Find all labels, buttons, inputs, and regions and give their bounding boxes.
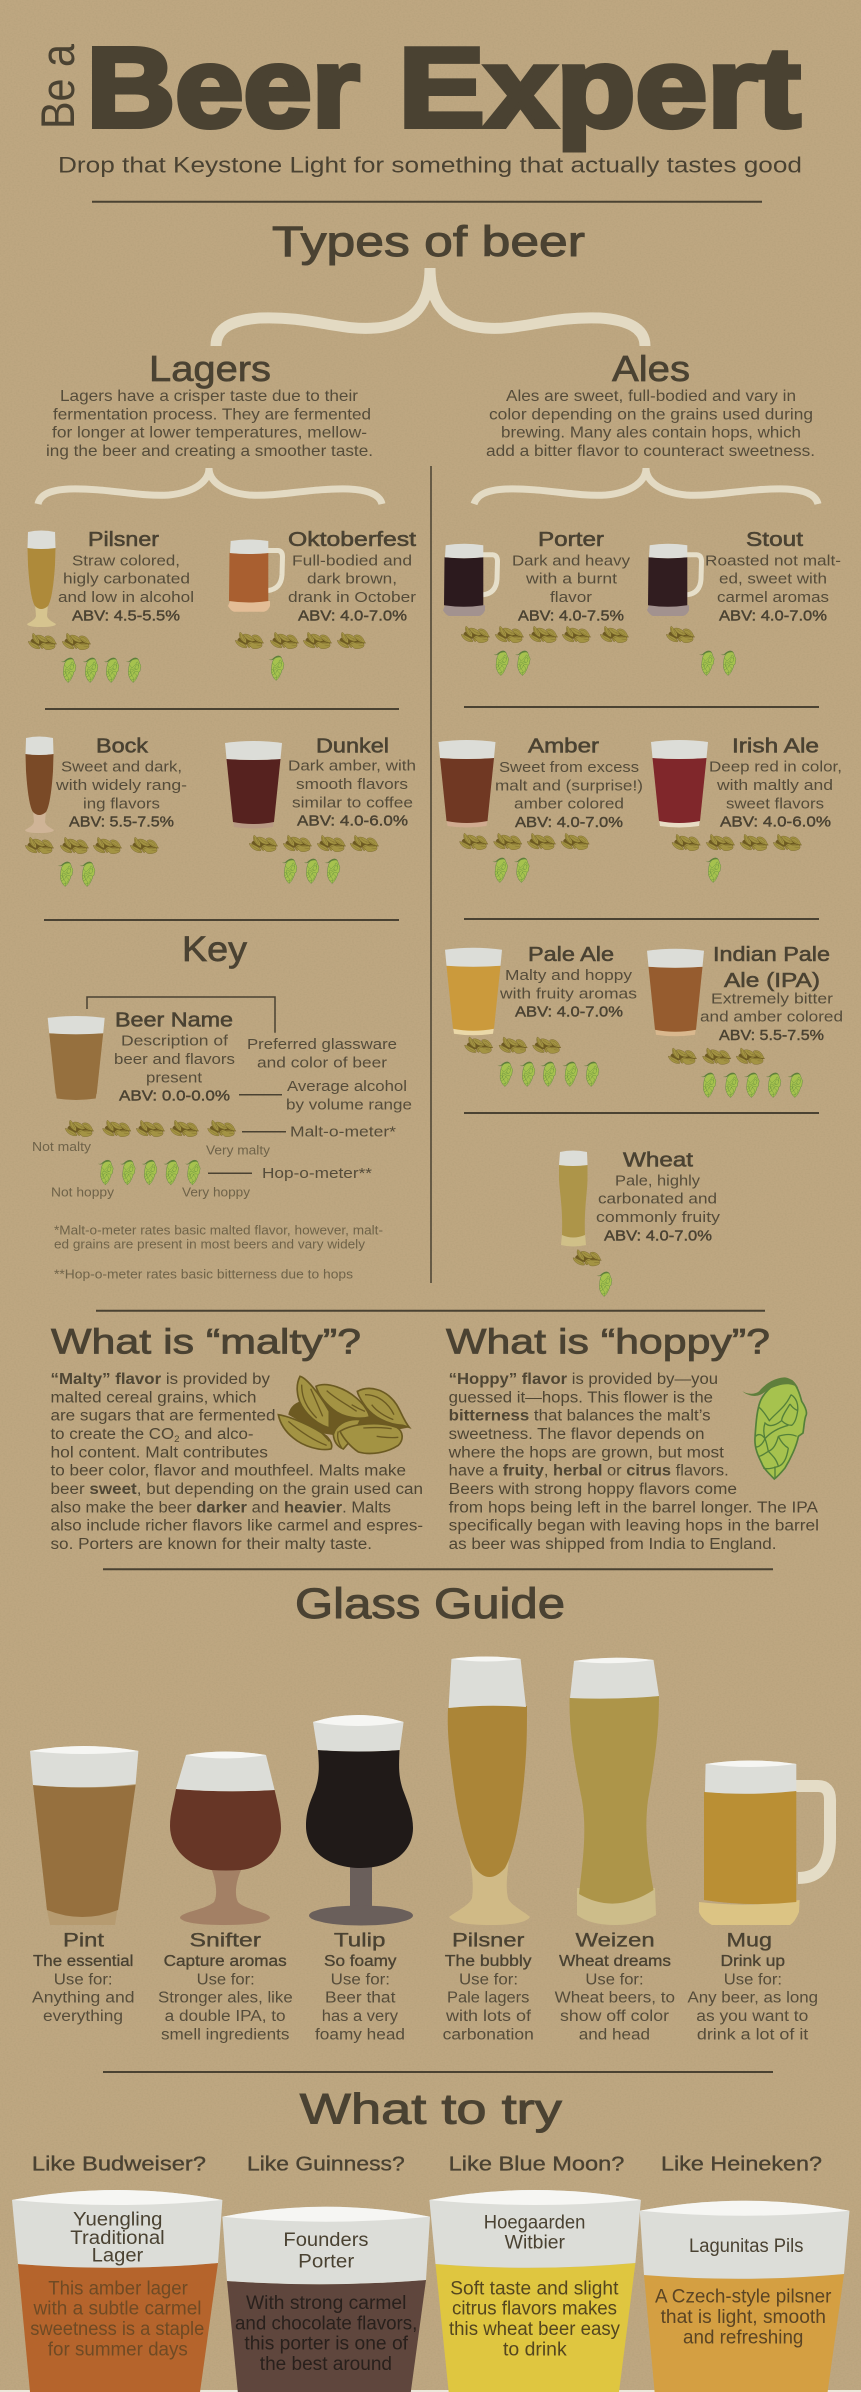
text: description sample: present [146, 1069, 203, 1086]
text: Dunkel description: smooth flavors [296, 776, 408, 793]
caption: Tulip: Tulip [334, 1931, 386, 1952]
caption: Tulip: has a very [322, 2008, 398, 2025]
text: malty explanation: to create the CO [50, 1426, 164, 1443]
caption: Mug: Drink up [720, 1953, 785, 1970]
malt-o-meter: 3 [465, 1037, 561, 1053]
text: IPA description: and amber colored [700, 1009, 843, 1026]
heading: What is malty: What is “malty”? [51, 1322, 361, 1361]
malt-o-meter: 4 [460, 833, 589, 850]
caption: Weizen: show off color [560, 2008, 669, 2025]
caption: Snifter: a double IPA, to [165, 2008, 286, 2025]
caption: Weizen: Wheat beers, to [555, 1990, 675, 2007]
text: hoppy explanation: sweetness. The flavor depends on [449, 1426, 704, 1443]
label: Like Heineken: Like Heineken? [661, 2154, 822, 2176]
text: Hoegaarden Witbier: Hoegaarden [484, 2212, 585, 2233]
icon: key pint glass [48, 1016, 105, 1100]
text: Stout name: Stout [746, 529, 804, 551]
text: IPA description [700, 990, 843, 1026]
hop-o-meter: 2 [492, 858, 529, 882]
text: Hoegaarden description [449, 2278, 620, 2360]
annotation: alcohol [239, 1078, 412, 1113]
caption: Mug [688, 1931, 818, 2043]
caption: Pilsner: Pilsner [452, 1931, 525, 1952]
beer: Bock [25, 736, 187, 886]
text: hoppy explanation: from hops being left in the barrel longer. The IPA [449, 1499, 819, 1516]
text: malty explanation: 2 [174, 1434, 180, 1444]
heading: What to try: What to try [300, 2085, 562, 2133]
recommendation: Blue Moon [429, 2154, 641, 2392]
caption: Pint: The essential [33, 1953, 133, 1970]
text: malty explanation [50, 1371, 423, 1553]
caption: Tulip: Beer that [325, 1990, 396, 2007]
malt-o-meter scale [65, 1120, 236, 1137]
text: ales description: color depending on the grains used during [489, 406, 813, 423]
big brace [216, 268, 645, 346]
text: Irish Ale description: with maltly and [716, 777, 833, 794]
text: Yuengling Traditional Lager: Traditional [70, 2228, 165, 2249]
text: Yuengling description [30, 2278, 204, 2360]
text: lagers description [46, 388, 373, 460]
illustration: mug [699, 1760, 830, 1925]
text: Oktoberfest ABV: ABV: 4.0-7.0% [298, 607, 407, 624]
panel: lagers intro [46, 348, 373, 460]
hop-o-meter: 3 [281, 859, 340, 883]
text: hoppy explanation: Beers with strong hoppy flavors come [449, 1481, 737, 1498]
text: Hoegaarden description: citrus flavors makes [452, 2299, 617, 2320]
text: Pale Ale name: Pale Ale [528, 944, 614, 966]
text: Lagunitas description [655, 2287, 832, 2348]
text: Porter ABV: ABV: 4.0-7.5% [518, 607, 624, 624]
heading: What is hoppy: What is “hoppy”? [446, 1322, 770, 1361]
text: Dunkel description [288, 758, 416, 811]
text: Dunkel description: similar to coffee [292, 794, 413, 811]
footnotes: ed grains are present in most beers and vary widely [54, 1238, 366, 1252]
text: Lagunitas description: and refreshing [683, 2327, 803, 2348]
caption: Pilsner: Use for: [459, 1971, 518, 1988]
text: Porter description: with a burnt [525, 571, 618, 588]
caption: Snifter: Snifter [190, 1931, 262, 1952]
caption: Pint: Use for: [54, 1971, 113, 1988]
beer: Stout [647, 529, 841, 675]
text: Founders description: this porter is one of [244, 2333, 409, 2354]
icon: pint glass [647, 949, 704, 1036]
text: Pale Ale description: with fruity aromas [499, 985, 637, 1002]
text: hoppy explanation: specifically began with leaving hops in the barrel [449, 1518, 819, 1535]
malt-o-meter: 4 [249, 835, 379, 852]
illustration: amber glass [12, 2190, 222, 2392]
caption: Tulip [315, 1931, 405, 2043]
text: Hoegaarden description: to drink [503, 2339, 567, 2360]
caption: Snifter: Use for: [197, 1971, 255, 1988]
text: Lagunitas Pils: Lagunitas Pils [689, 2236, 803, 2257]
text: Founders Porter: Porter [298, 2252, 355, 2273]
text: ales description: add a bitter flavor to counteract sweetness. [486, 443, 815, 460]
text: ales description [486, 388, 815, 460]
text: Bock description: with widely rang- [55, 777, 187, 794]
caption: Mug: Mug [726, 1931, 772, 1952]
label: Not malty: Not malty [32, 1139, 92, 1154]
glass: Snifter [158, 1752, 293, 2043]
text: IPA name: Ale (IPA) [724, 970, 820, 992]
text: Founders Porter: Founders [283, 2230, 368, 2251]
beer: Indian Pale Ale [647, 944, 843, 1097]
title: Beer Expert: Beer [86, 24, 360, 150]
hop-o-meter: 4 [60, 658, 141, 682]
text: Irish Ale ABV: ABV: 4.0-6.0% [720, 814, 831, 831]
text: Wheat description: Pale, highly [615, 1172, 701, 1189]
annotation: glassware: and color of beer [257, 1054, 387, 1071]
beer: Pale Ale [445, 944, 637, 1086]
text: Yuengling Traditional Lager [70, 2210, 165, 2267]
illustration: wheat glass [429, 2190, 641, 2392]
annotation: alcohol: by volume range [286, 1096, 412, 1113]
text: Pilsner description [58, 552, 194, 606]
text: Wheat ABV: ABV: 4.0-7.0% [604, 1227, 712, 1244]
text: hoppy explanation: as beer was shipped from India to England. [449, 1536, 776, 1553]
panel: key [32, 930, 412, 1281]
text: description sample: beer and flavors [114, 1051, 235, 1068]
heading: Glass Guide: Glass Guide [295, 1580, 565, 1628]
text: malty explanation: “Malty” flavor is provided by [50, 1371, 270, 1388]
illustration: porter glass [222, 2207, 430, 2392]
text: Bock name: Bock [96, 736, 149, 758]
malt-o-meter: 3 [668, 1048, 765, 1064]
title [31, 24, 800, 150]
text: Amber description: malt and (surprise!) [495, 777, 643, 794]
text: description sample: Description of [121, 1033, 229, 1050]
text: Founders description: the best around [260, 2354, 392, 2375]
annotation: hop-o-meter: Hop-o-meter** [262, 1165, 372, 1182]
text: hoppy explanation: have a fruity, herbal or citrus flavors. [449, 1463, 729, 1480]
text: lagers description: fermentation process. They are fermented [53, 406, 371, 423]
icon: pint glass [445, 948, 502, 1035]
annotation: glassware [247, 1036, 397, 1071]
glass: Pint [30, 1746, 138, 2025]
caption: Pint: Anything and [32, 1990, 134, 2007]
text: Porter description: Dark and heavy [512, 552, 631, 569]
text: Lagunitas description: A Czech-style pilsner [655, 2287, 832, 2308]
heading: Key: Key [182, 930, 248, 969]
text: Irish Ale description [709, 759, 842, 812]
footnotes: *Malt-o-meter rates basic malted flavor, however, malt- [54, 1223, 383, 1237]
text: ABV sample: ABV: 0.0-0.0% [119, 1088, 230, 1105]
text: Bock description [55, 759, 187, 812]
caption: Weizen: Use for: [585, 1971, 644, 1988]
text: Stout ABV: ABV: 4.0-7.0% [719, 607, 827, 624]
caption: Tulip: So foamy [324, 1953, 397, 1970]
text: Oktoberfest description [288, 552, 416, 606]
text: ales description: brewing. Many ales contain hops, which [501, 425, 801, 442]
icon: mug [647, 544, 702, 616]
title: Beer Expert: Expert [398, 24, 800, 150]
malt-o-meter: 1 [573, 1250, 601, 1266]
text: Wheat description: carbonated and [598, 1191, 717, 1208]
text: Pilsner description: higly carbonated [63, 571, 190, 588]
text: Amber description [495, 759, 643, 813]
caption: Pilsner [443, 1931, 534, 2043]
icon: pint glass [438, 740, 496, 828]
text: Amber description: Sweet from excess [499, 759, 639, 776]
text: Stout description: Roasted not malt- [705, 552, 841, 569]
bracket: glassware pointer [87, 997, 275, 1033]
small brace: lagers [38, 468, 382, 504]
icon: hop flower [742, 1377, 806, 1479]
footnotes: **Hop-o-meter rates basic bitterness due to hops [54, 1267, 353, 1281]
heading: Types of beer: Types of beer [272, 218, 585, 266]
caption: Snifter [158, 1931, 293, 2043]
text: Yuengling Traditional Lager: Yuengling [73, 2210, 162, 2231]
glass: Weizen [555, 1658, 675, 2043]
text: Bock ABV: ABV: 5.5-7.5% [69, 814, 174, 831]
text: Wheat name: Wheat [623, 1149, 694, 1171]
icon: pint glass [651, 740, 708, 828]
illustration: pilsner [448, 1656, 530, 1925]
text: Beer Name: Beer Name [115, 1010, 233, 1032]
text: malty explanation: also include richer flavors like carmel and espres- [50, 1518, 423, 1535]
text: Stout description: ed, sweet with [719, 571, 827, 588]
annotation: glassware: Preferred glassware [247, 1036, 397, 1053]
caption: Pilsner: Pale lagers [447, 1990, 530, 2007]
text: Pilsner description: Straw colored, [72, 552, 180, 569]
caption: Weizen: and head [579, 2026, 650, 2043]
hop-o-meter: 2 [493, 651, 530, 675]
text: Irish Ale description: Deep red in color, [709, 759, 842, 776]
text: Yuengling description: with a subtle carmel [32, 2299, 201, 2320]
text: Founders description: With strong carmel [246, 2293, 406, 2314]
hop-o-meter: 2 [57, 862, 95, 886]
text: Pilsner description: and low in alcohol [58, 589, 194, 606]
hop-o-meter scale [97, 1160, 200, 1185]
annotation: malt-o-meter: Malt-o-meter* [290, 1123, 396, 1140]
text: IPA name: Indian Pale [713, 944, 830, 966]
text: description sample [114, 1033, 235, 1086]
beer: Pilsner [27, 529, 194, 682]
panel: what is malty [50, 1322, 423, 1553]
text: hoppy explanation: guessed it—hops. This flower is the [449, 1389, 713, 1406]
caption: Tulip: Use for: [331, 1971, 390, 1988]
text: Oktoberfest description: drank in October [288, 589, 416, 606]
text: Hoegaarden description: this wheat beer easy [449, 2319, 620, 2340]
beer: Porter [443, 529, 631, 675]
text: Pale Ale ABV: ABV: 4.0-7.0% [515, 1004, 623, 1021]
hop-o-meter: 1 [268, 656, 284, 680]
text: malty explanation: hol content. Malt contributes [50, 1444, 268, 1461]
text: lagers description: for longer at lower temperatures, mellow- [52, 425, 367, 442]
text: Bock description: Sweet and dark, [61, 759, 182, 776]
caption: Snifter: Stronger ales, like [158, 1990, 293, 2007]
text: Porter description: flavor [550, 589, 592, 606]
text: Founders description: and chocolate flavors, [235, 2313, 417, 2334]
recommendation: Budweiser [12, 2154, 222, 2392]
text: Bock description: ing flavors [83, 795, 160, 812]
beer: Wheat [559, 1149, 721, 1296]
text: Yuengling description: for summer days [48, 2339, 188, 2360]
beer: Oktoberfest [228, 529, 417, 680]
text: Irish Ale description: sweet flavors [726, 795, 824, 812]
text: Irish Ale name: Irish Ale [732, 736, 819, 758]
malt-o-meter: 4 [235, 632, 366, 649]
icon: wheat glass [559, 1150, 588, 1246]
text: lagers description: Lagers have a crisper taste due to their [60, 388, 359, 405]
title: Be a: Be a [31, 43, 84, 129]
text: Dunkel ABV: ABV: 4.0-6.0% [297, 813, 408, 830]
text: Dunkel name: Dunkel [316, 736, 389, 758]
illustration: pint [30, 1746, 138, 1925]
glass: Mug [688, 1760, 830, 2043]
label: Very hoppy: Very hoppy [182, 1184, 251, 1199]
text: hoppy explanation: where the hops are grown, but most [448, 1444, 725, 1461]
malt-o-meter: 4 [672, 834, 802, 851]
text: ales description: Ales are sweet, full-bodied and vary in [506, 388, 796, 405]
text: Hoegaarden Witbier [484, 2212, 585, 2253]
subtitle: Drop that Keystone Light for something that actually tastes good [58, 153, 802, 178]
caption: Mug: drink a lot of it [697, 2026, 809, 2043]
malt-o-meter: 4 [25, 837, 159, 854]
caption: Mug: Use for: [724, 1971, 782, 1988]
label: Like Guinness: Like Guinness? [247, 2154, 405, 2176]
illustration: weizen [569, 1658, 659, 1925]
text: Pilsner name: Pilsner [88, 529, 159, 551]
caption: Pint: everything [43, 2008, 123, 2025]
text: Wheat description [596, 1172, 721, 1226]
beer: Irish Ale [651, 736, 842, 882]
text: IPA name [713, 944, 830, 992]
illustration: tulip [306, 1715, 413, 1926]
text: Oktoberfest description: Full-bodied and [292, 552, 412, 569]
caption: Pint [32, 1931, 134, 2025]
text: Yuengling description: This amber lager [48, 2278, 188, 2299]
text: hoppy explanation: bitterness that balances the malt’s [449, 1408, 711, 1425]
icon: bock glass [25, 736, 54, 833]
glass: Pilsner [443, 1656, 534, 2043]
caption: Mug: as you want to [696, 2008, 808, 2025]
text: Stout description [705, 552, 841, 606]
icon: malt grains [278, 1376, 409, 1453]
label: Very malty: Very malty [206, 1142, 271, 1157]
text: Amber name: Amber [528, 736, 599, 758]
text: malty explanation: and alco- [180, 1426, 254, 1443]
glass: Tulip [306, 1715, 413, 2043]
caption: Weizen: Wheat dreams [559, 1953, 671, 1970]
heading: Lagers: Lagers [149, 348, 271, 389]
hop-o-meter: 1 [705, 858, 721, 882]
text: Stout description: carmel aromas [717, 589, 829, 606]
text: malty explanation: to beer color, flavor and mouthfeel. Malts make [50, 1463, 406, 1480]
text: Amber description: amber colored [514, 796, 624, 813]
text: Oktoberfest description: dark brown, [307, 571, 397, 588]
hop-o-meter: 1 [596, 1272, 612, 1296]
text: Pale Ale description: Malty and hoppy [505, 967, 633, 984]
text: malty explanation: also make the beer darker and heavier. Malts [50, 1499, 391, 1516]
text: IPA ABV: ABV: 5.5-7.5% [719, 1027, 824, 1044]
heading: Ales: Ales [612, 348, 690, 389]
hop-o-meter: 2 [698, 651, 736, 675]
text: Founders description [235, 2293, 417, 2375]
text: Founders Porter [283, 2230, 368, 2273]
hop-o-meter: 5 [700, 1073, 803, 1097]
text: Pilsner ABV: ABV: 4.5-5.5% [72, 607, 180, 624]
label: Not hoppy: Not hoppy [51, 1184, 115, 1199]
recommendation: Guinness [222, 2154, 430, 2392]
caption: Tulip: foamy head [315, 2026, 405, 2043]
text: malty explanation: are sugars that are fermented [50, 1408, 276, 1425]
text: Amber ABV: ABV: 4.0-7.0% [515, 814, 623, 831]
text: Yuengling description: sweetness is a staple [30, 2319, 204, 2340]
text: Pale Ale description [499, 967, 637, 1002]
hop-o-meter: 5 [497, 1062, 599, 1086]
text: malty explanation: beer sweet , but depending on the grain used can [50, 1481, 423, 1498]
label: Like Budweiser: Like Budweiser? [32, 2154, 206, 2176]
caption: Pilsner: with lots of [445, 2008, 532, 2025]
text: malty explanation: so. Porters are known for their malty taste. [50, 1536, 372, 1553]
text: Yuengling Traditional Lager: Lager [92, 2246, 144, 2267]
text: lagers description: ing the beer and creating a smoother taste. [46, 443, 373, 460]
text: Lagunitas description: that is light, smooth [661, 2307, 826, 2328]
label: Like Blue Moon: Like Blue Moon? [449, 2154, 624, 2176]
text: Oktoberfest name: Oktoberfest [288, 529, 417, 551]
text: hoppy explanation: “Hoppy” flavor is provided by—you [449, 1371, 718, 1388]
icon: pint glass [225, 741, 282, 828]
caption: Snifter: Capture aromas [164, 1953, 287, 1970]
icon: mug [443, 544, 498, 616]
text: Hoegaarden description: Soft taste and slight [450, 2278, 619, 2299]
text: malty explanation: malted cereal grains, which [50, 1389, 256, 1406]
annotation: alcohol: Average alcohol [287, 1078, 407, 1095]
icon: mug [228, 540, 282, 612]
text: Hoegaarden Witbier: Witbier [505, 2232, 566, 2253]
caption: Mug: Any beer, as long [688, 1990, 818, 2007]
footnotes [54, 1223, 383, 1281]
panel: ales intro [486, 348, 815, 460]
title: Beer Expert [86, 24, 800, 150]
text: Wheat description: commonly fruity [596, 1209, 721, 1226]
panel: what is hoppy [446, 1322, 819, 1553]
recommendation: Heineken [640, 2154, 850, 2392]
beer: Dunkel [225, 736, 416, 883]
malt-o-meter: 1 [666, 626, 695, 643]
caption: Pilsner: carbonation [443, 2026, 534, 2043]
caption: Snifter: smell ingredients [161, 2026, 290, 2043]
text: Porter name: Porter [538, 529, 604, 551]
icon: pilsner glass [27, 530, 56, 627]
illustration: pilsner glass [640, 2201, 850, 2392]
malt-o-meter: 5 [461, 626, 629, 643]
caption: Weizen: Weizen [576, 1931, 655, 1952]
beer: Amber [438, 736, 643, 882]
caption: Weizen [555, 1931, 675, 2043]
caption: Pint: Pint [63, 1931, 105, 1952]
malt-o-meter: 2 [28, 633, 91, 650]
caption: Pilsner: The bubbly [445, 1953, 532, 1970]
text: IPA description: Extremely bitter [711, 990, 833, 1007]
small brace: ales [474, 468, 818, 504]
text: hoppy explanation [448, 1371, 819, 1553]
illustration: snifter [170, 1752, 281, 1925]
text: Dunkel description: Dark amber, with [288, 758, 416, 775]
text: Porter description [512, 552, 631, 606]
